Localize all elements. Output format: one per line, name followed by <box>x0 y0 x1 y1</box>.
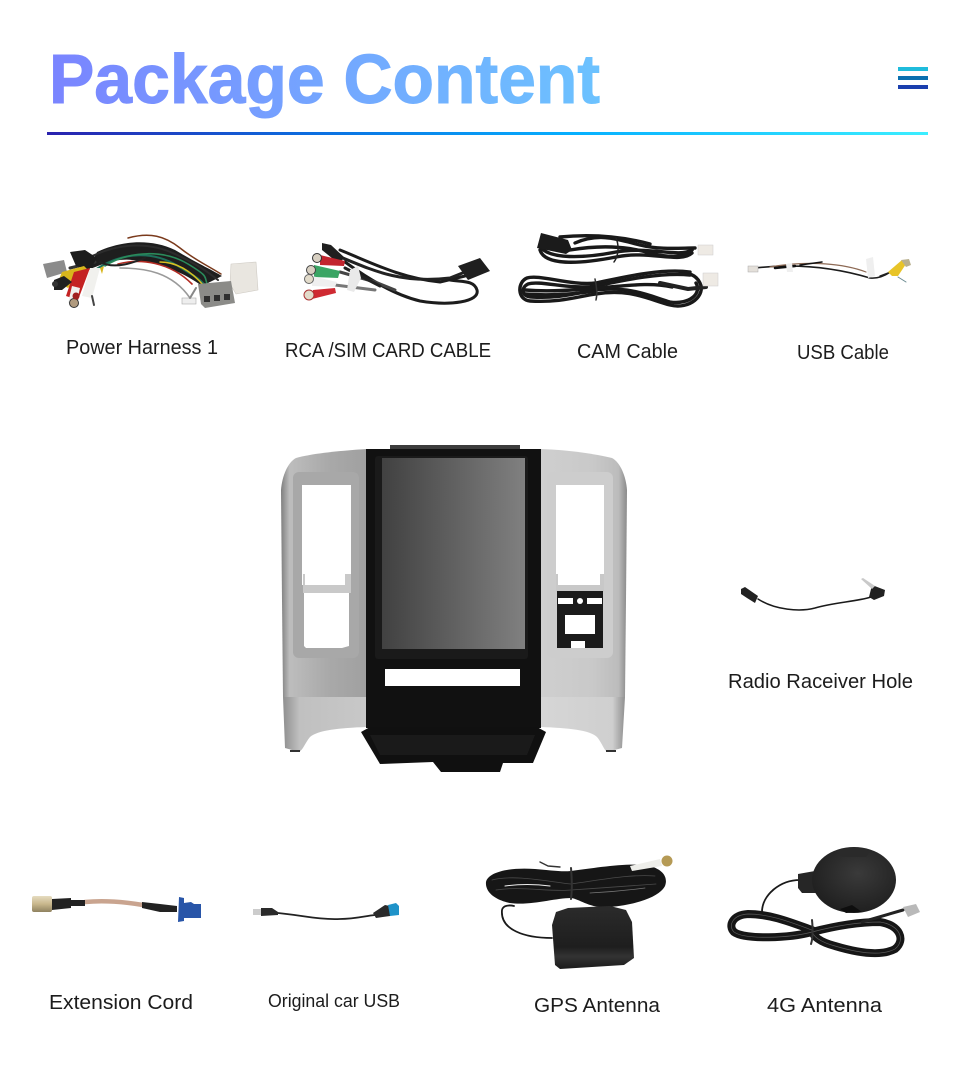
RCA red plug <box>320 255 345 266</box>
GPS band <box>570 868 573 899</box>
item: 4G antenna <box>731 847 920 953</box>
item: radio receiver cable <box>741 578 885 610</box>
right crossbar <box>556 574 604 592</box>
screen surround <box>375 456 528 659</box>
RCA black jack <box>322 243 345 263</box>
GPS white lead <box>630 859 662 871</box>
GPS antenna wire <box>502 905 552 938</box>
4G antenna wire <box>762 880 800 912</box>
screen <box>382 458 525 649</box>
label: Original car USB: Original car USB <box>268 991 400 1011</box>
upper white plug <box>698 245 713 255</box>
RCA white plug <box>312 276 337 287</box>
RCA red plug lower <box>312 288 336 299</box>
lower coil <box>520 271 701 306</box>
white tags <box>786 257 875 278</box>
item: original car USB <box>253 903 399 919</box>
upper coil <box>540 236 695 262</box>
label: CAM Cable: CAM Cable <box>577 341 678 363</box>
item: USB cable <box>748 257 911 282</box>
label: Radio Raceiver Hole: Radio Raceiver Hole <box>728 671 913 693</box>
right window mount <box>557 591 603 648</box>
item: RCA / SIM card cable <box>304 243 490 303</box>
tray recess <box>370 735 535 755</box>
4G tab <box>798 871 820 893</box>
USB wire <box>278 913 375 919</box>
label: GPS Antenna: GPS Antenna <box>534 995 661 1017</box>
radio silver pin <box>861 578 875 589</box>
RCA green plug <box>314 265 340 278</box>
label: Extension Cord: Extension Cord <box>49 992 193 1014</box>
radio black connector <box>741 587 758 603</box>
small white plug <box>182 298 196 304</box>
right silver panel <box>541 449 627 697</box>
black relay block <box>70 250 97 270</box>
label: RCA / SIM card cable: RCA /SIM CARD CABLE <box>285 340 491 362</box>
GPS gold tip <box>662 856 672 866</box>
RCA cable bundle <box>335 250 477 303</box>
lower white plug <box>703 273 718 286</box>
lower band <box>595 279 597 300</box>
left lower panel <box>283 697 366 752</box>
black sleeve left <box>52 898 85 910</box>
SIM connector <box>458 258 490 280</box>
silver tip <box>253 909 261 915</box>
GPS coil <box>486 862 666 907</box>
item: GPS antenna <box>486 856 672 969</box>
title: Package Content <box>49 40 600 118</box>
right window frame <box>547 472 613 658</box>
4G puck <box>812 847 896 913</box>
feet <box>290 750 616 752</box>
label: USB Cable: USB Cable <box>797 342 889 364</box>
left silver panel <box>281 449 367 697</box>
black sleeve right <box>142 902 177 912</box>
radio cable wire <box>758 597 871 610</box>
right lower panel <box>541 697 625 752</box>
right window opening <box>556 485 604 585</box>
beige coax <box>85 901 143 905</box>
white plug <box>748 266 758 272</box>
4G coil <box>731 914 900 953</box>
gray connector left <box>43 260 67 278</box>
yellow RCA plug <box>888 260 906 276</box>
4G puck notch top <box>836 847 870 857</box>
left window opening <box>302 485 351 585</box>
bottom black tray <box>361 727 546 772</box>
icon: menu bars <box>898 67 928 89</box>
RCA plugs cluster <box>52 266 104 308</box>
blue Fakra <box>178 897 201 922</box>
center black bezel <box>366 449 541 728</box>
USB wires <box>755 262 896 278</box>
4G lead <box>862 910 903 922</box>
4G puck notch bottom <box>840 905 862 913</box>
white slot <box>385 669 520 686</box>
label: 4G Antenna: 4G Antenna <box>767 995 883 1017</box>
item: CAM cable <box>520 233 718 306</box>
GPS receiver block <box>552 906 634 969</box>
title underline <box>47 132 928 135</box>
harness wire bundle <box>70 235 222 298</box>
lower lead <box>660 283 706 289</box>
blue head <box>388 903 399 916</box>
left crossbar <box>303 574 351 593</box>
left window lower opening <box>304 593 349 648</box>
left window frame <box>293 472 359 658</box>
top strip <box>390 445 520 450</box>
black plug <box>261 908 278 916</box>
item: extension cord <box>32 896 201 922</box>
head unit <box>281 445 627 772</box>
radio angled plug <box>869 585 885 600</box>
4G SMA connector <box>903 904 920 917</box>
item: power harness <box>43 235 258 308</box>
label: Power Harness 1: Power Harness 1 <box>66 337 218 359</box>
upper connector <box>537 233 572 254</box>
white label <box>347 266 361 292</box>
upper band <box>614 238 618 262</box>
4G band <box>811 920 813 944</box>
black boot <box>373 905 390 918</box>
white connector right <box>230 262 258 294</box>
gray connector bottom <box>198 281 235 308</box>
gold SMA <box>32 896 52 912</box>
